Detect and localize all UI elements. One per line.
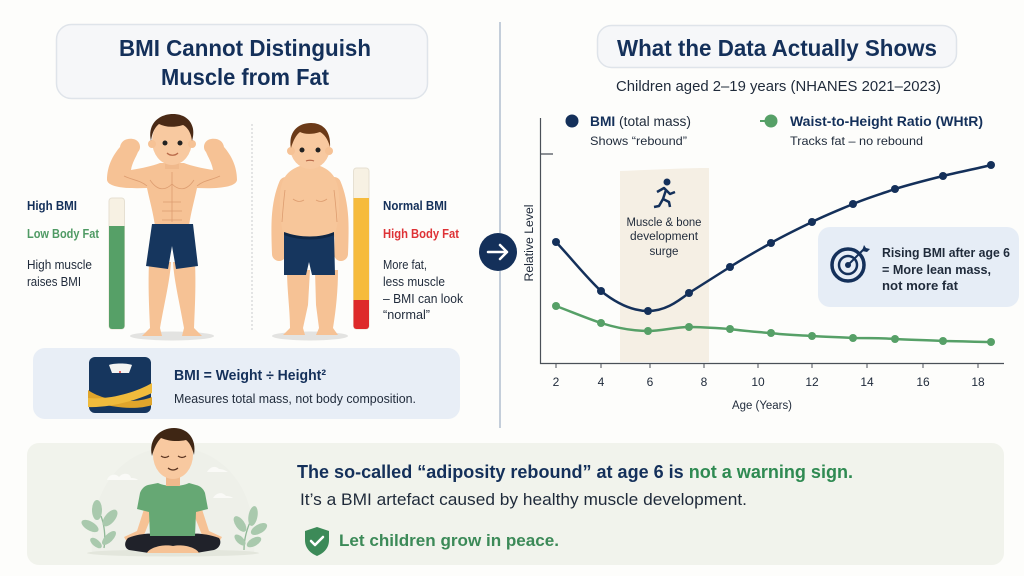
label: high BMI text: raises BMI bbox=[27, 275, 81, 289]
legend: WHtR bbox=[760, 114, 983, 148]
callout text: not more fat bbox=[882, 279, 959, 293]
x axis ticks and labels: 14 bbox=[860, 375, 874, 389]
plant right bbox=[231, 505, 269, 550]
panel: higher fat child bbox=[272, 123, 464, 340]
conclusion text: The so-called “adiposity rebound” at age 6 is not a warning sign. bbox=[297, 462, 853, 482]
x axis ticks and labels: 4 bbox=[598, 375, 605, 389]
x axis ticks and labels: 2 bbox=[553, 375, 560, 389]
legend: WHtR: Tracks fat – no rebound bbox=[790, 134, 923, 148]
plant left bbox=[80, 500, 120, 550]
series: WHtR bbox=[552, 302, 995, 346]
panel: conclusion bbox=[27, 428, 1004, 565]
callout text: = More lean mass, bbox=[882, 263, 991, 277]
body fat bar: low bbox=[109, 198, 124, 329]
y axis title: Relative Level bbox=[524, 204, 536, 282]
x axis ticks and labels: 18 bbox=[971, 375, 985, 389]
legend: BMI bbox=[566, 114, 691, 148]
icon: scale with tape measure bbox=[88, 357, 152, 413]
panel: BMI formula bbox=[33, 348, 460, 419]
x axis ticks and labels: 6 bbox=[647, 375, 654, 389]
callout: rising BMI bbox=[818, 227, 1019, 307]
line chart bbox=[524, 114, 1004, 412]
vertical section divider bbox=[499, 22, 501, 428]
label: normal BMI text: More fat, bbox=[383, 258, 427, 272]
label: normal BMI text: “normal” bbox=[383, 308, 430, 322]
legend: BMI: Shows “rebound” bbox=[590, 134, 687, 148]
panel: muscular child bbox=[27, 114, 237, 340]
vertical dashed divider between children bbox=[251, 124, 253, 332]
formula text bbox=[174, 367, 416, 406]
band label bbox=[626, 217, 702, 258]
icon: target bbox=[832, 245, 870, 281]
label: normal BMI text: less muscle bbox=[383, 275, 445, 289]
illustration: higher fat boy bbox=[272, 123, 348, 340]
legs bbox=[125, 534, 220, 553]
axes bbox=[540, 118, 1004, 364]
x axis ticks and labels: 12 bbox=[805, 375, 819, 389]
label: high BMI text: High BMI bbox=[27, 199, 77, 213]
x axis ticks and labels bbox=[553, 363, 985, 389]
formula text: BMI = Weight ÷ Height² bbox=[174, 367, 326, 384]
conclusion text: Let children grow in peace. bbox=[339, 531, 559, 550]
conclusion text bbox=[297, 462, 853, 556]
band label: development bbox=[630, 231, 699, 243]
arrow bbox=[479, 233, 517, 271]
x axis title: Age (Years) bbox=[732, 400, 792, 412]
label: normal BMI text: Normal BMI bbox=[383, 199, 447, 213]
band label: surge bbox=[650, 246, 678, 258]
conclusion text: It’s a BMI artefact caused by healthy muscle development. bbox=[300, 491, 747, 509]
label: normal BMI text: High Body Fat bbox=[383, 227, 460, 241]
body fat bar: high bbox=[354, 168, 369, 329]
label: normal BMI text: – BMI can look bbox=[383, 292, 464, 306]
illustration: muscular boy bbox=[107, 114, 237, 340]
torso bbox=[137, 483, 208, 536]
right title: What the Data Actually Shows bbox=[617, 35, 937, 61]
left title: Muscle from Fat bbox=[161, 64, 329, 90]
x axis ticks and labels: 8 bbox=[701, 375, 708, 389]
legend: WHtR: Waist-to-Height Ratio (WHtR) bbox=[790, 114, 983, 129]
arms bbox=[124, 503, 222, 544]
icon: running child bbox=[654, 178, 675, 207]
label: high BMI text bbox=[27, 199, 100, 289]
callout text bbox=[882, 246, 1010, 293]
callout text: Rising BMI after age 6 bbox=[882, 246, 1010, 260]
head bbox=[166, 470, 180, 486]
icon: shield check bbox=[305, 527, 329, 556]
legend: BMI: BMI (total mass) bbox=[590, 114, 691, 129]
label: high BMI text: Low Body Fat bbox=[27, 227, 100, 241]
illustration: meditating child bbox=[80, 428, 269, 556]
subtitle: Children aged 2–19 years (NHANES 2021–2023) bbox=[616, 79, 941, 95]
x axis ticks and labels: 16 bbox=[916, 375, 930, 389]
series: BMI bbox=[552, 161, 995, 315]
formula text: Measures total mass, not body composition. bbox=[174, 392, 416, 406]
right title bbox=[598, 26, 956, 68]
label: normal BMI text bbox=[383, 199, 464, 322]
band label: Muscle & bone bbox=[626, 217, 702, 229]
left title: BMI Cannot Distinguish bbox=[119, 35, 371, 61]
left title bbox=[56, 24, 428, 98]
highlight band: muscle and bone surge bbox=[620, 168, 709, 362]
x axis ticks and labels: 10 bbox=[751, 375, 765, 389]
label: high BMI text: High muscle bbox=[27, 258, 92, 272]
